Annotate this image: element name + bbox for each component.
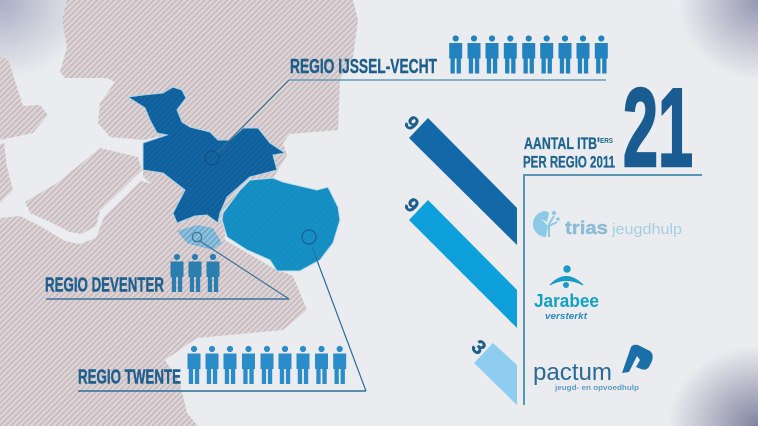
bar: Jarabee 9: [409, 200, 517, 328]
logo: Pactum jeugd- en opvoedhulp: [533, 345, 653, 392]
bar: Pactum 3: [474, 343, 517, 405]
icons: 3 people Deventer: [170, 254, 220, 292]
bar: Trias 9: [409, 118, 517, 245]
label: Aantal ITB'ers per regio 2011: ERS: [600, 138, 613, 145]
label: Aantal ITB'ers per regio 2011: PER REGIO 2011: [523, 154, 615, 172]
logo: Jarabee versterkt: [534, 265, 599, 322]
logo: Trias jeugdhulp: trias: [565, 218, 608, 238]
value: 9: 9: [400, 194, 423, 217]
map: surrounding land: [0, 0, 358, 426]
heading: Regio Twente: REGIO TWENTE: [78, 366, 181, 388]
map: Regio IJssel-Vecht: [128, 87, 285, 223]
logo: Jarabee versterkt: Jarabee: [534, 291, 599, 311]
total: 21: 21: [623, 66, 693, 190]
label: Aantal ITB'ers per regio 2011: [523, 135, 615, 172]
heading: Regio IJssel-Vecht: REGIO IJSSEL-VECHT: [290, 56, 437, 78]
heading: Regio Deventer: REGIO DEVENTER: [45, 274, 164, 296]
logo: Pactum jeugd- en opvoedhulp: pactum: [533, 359, 612, 386]
icons: 9 people IJssel-Vecht: [449, 35, 608, 74]
logo: Jarabee versterkt: versterkt: [545, 311, 588, 322]
map: Regio Deventer: [177, 225, 222, 250]
callout: Regio Deventer: [46, 232, 289, 299]
value: 9: 9: [400, 112, 423, 135]
label: Aantal ITB'ers per regio 2011: AANTAL ITB': [524, 135, 600, 153]
axis lines: [524, 175, 702, 405]
logo: Trias jeugdhulp: [533, 211, 682, 238]
icons: 9 people Twente: [188, 346, 346, 384]
logo: Trias jeugdhulp: jeugdhulp: [611, 221, 682, 238]
value: 3: 3: [467, 336, 490, 359]
map: Regio Twente: [222, 178, 340, 271]
callout: Regio Twente: [78, 230, 366, 391]
logo: Pactum jeugd- en opvoedhulp: jeugd- en opvoedhulp: [554, 383, 639, 392]
callout: Regio IJssel-Vecht: [205, 80, 606, 165]
